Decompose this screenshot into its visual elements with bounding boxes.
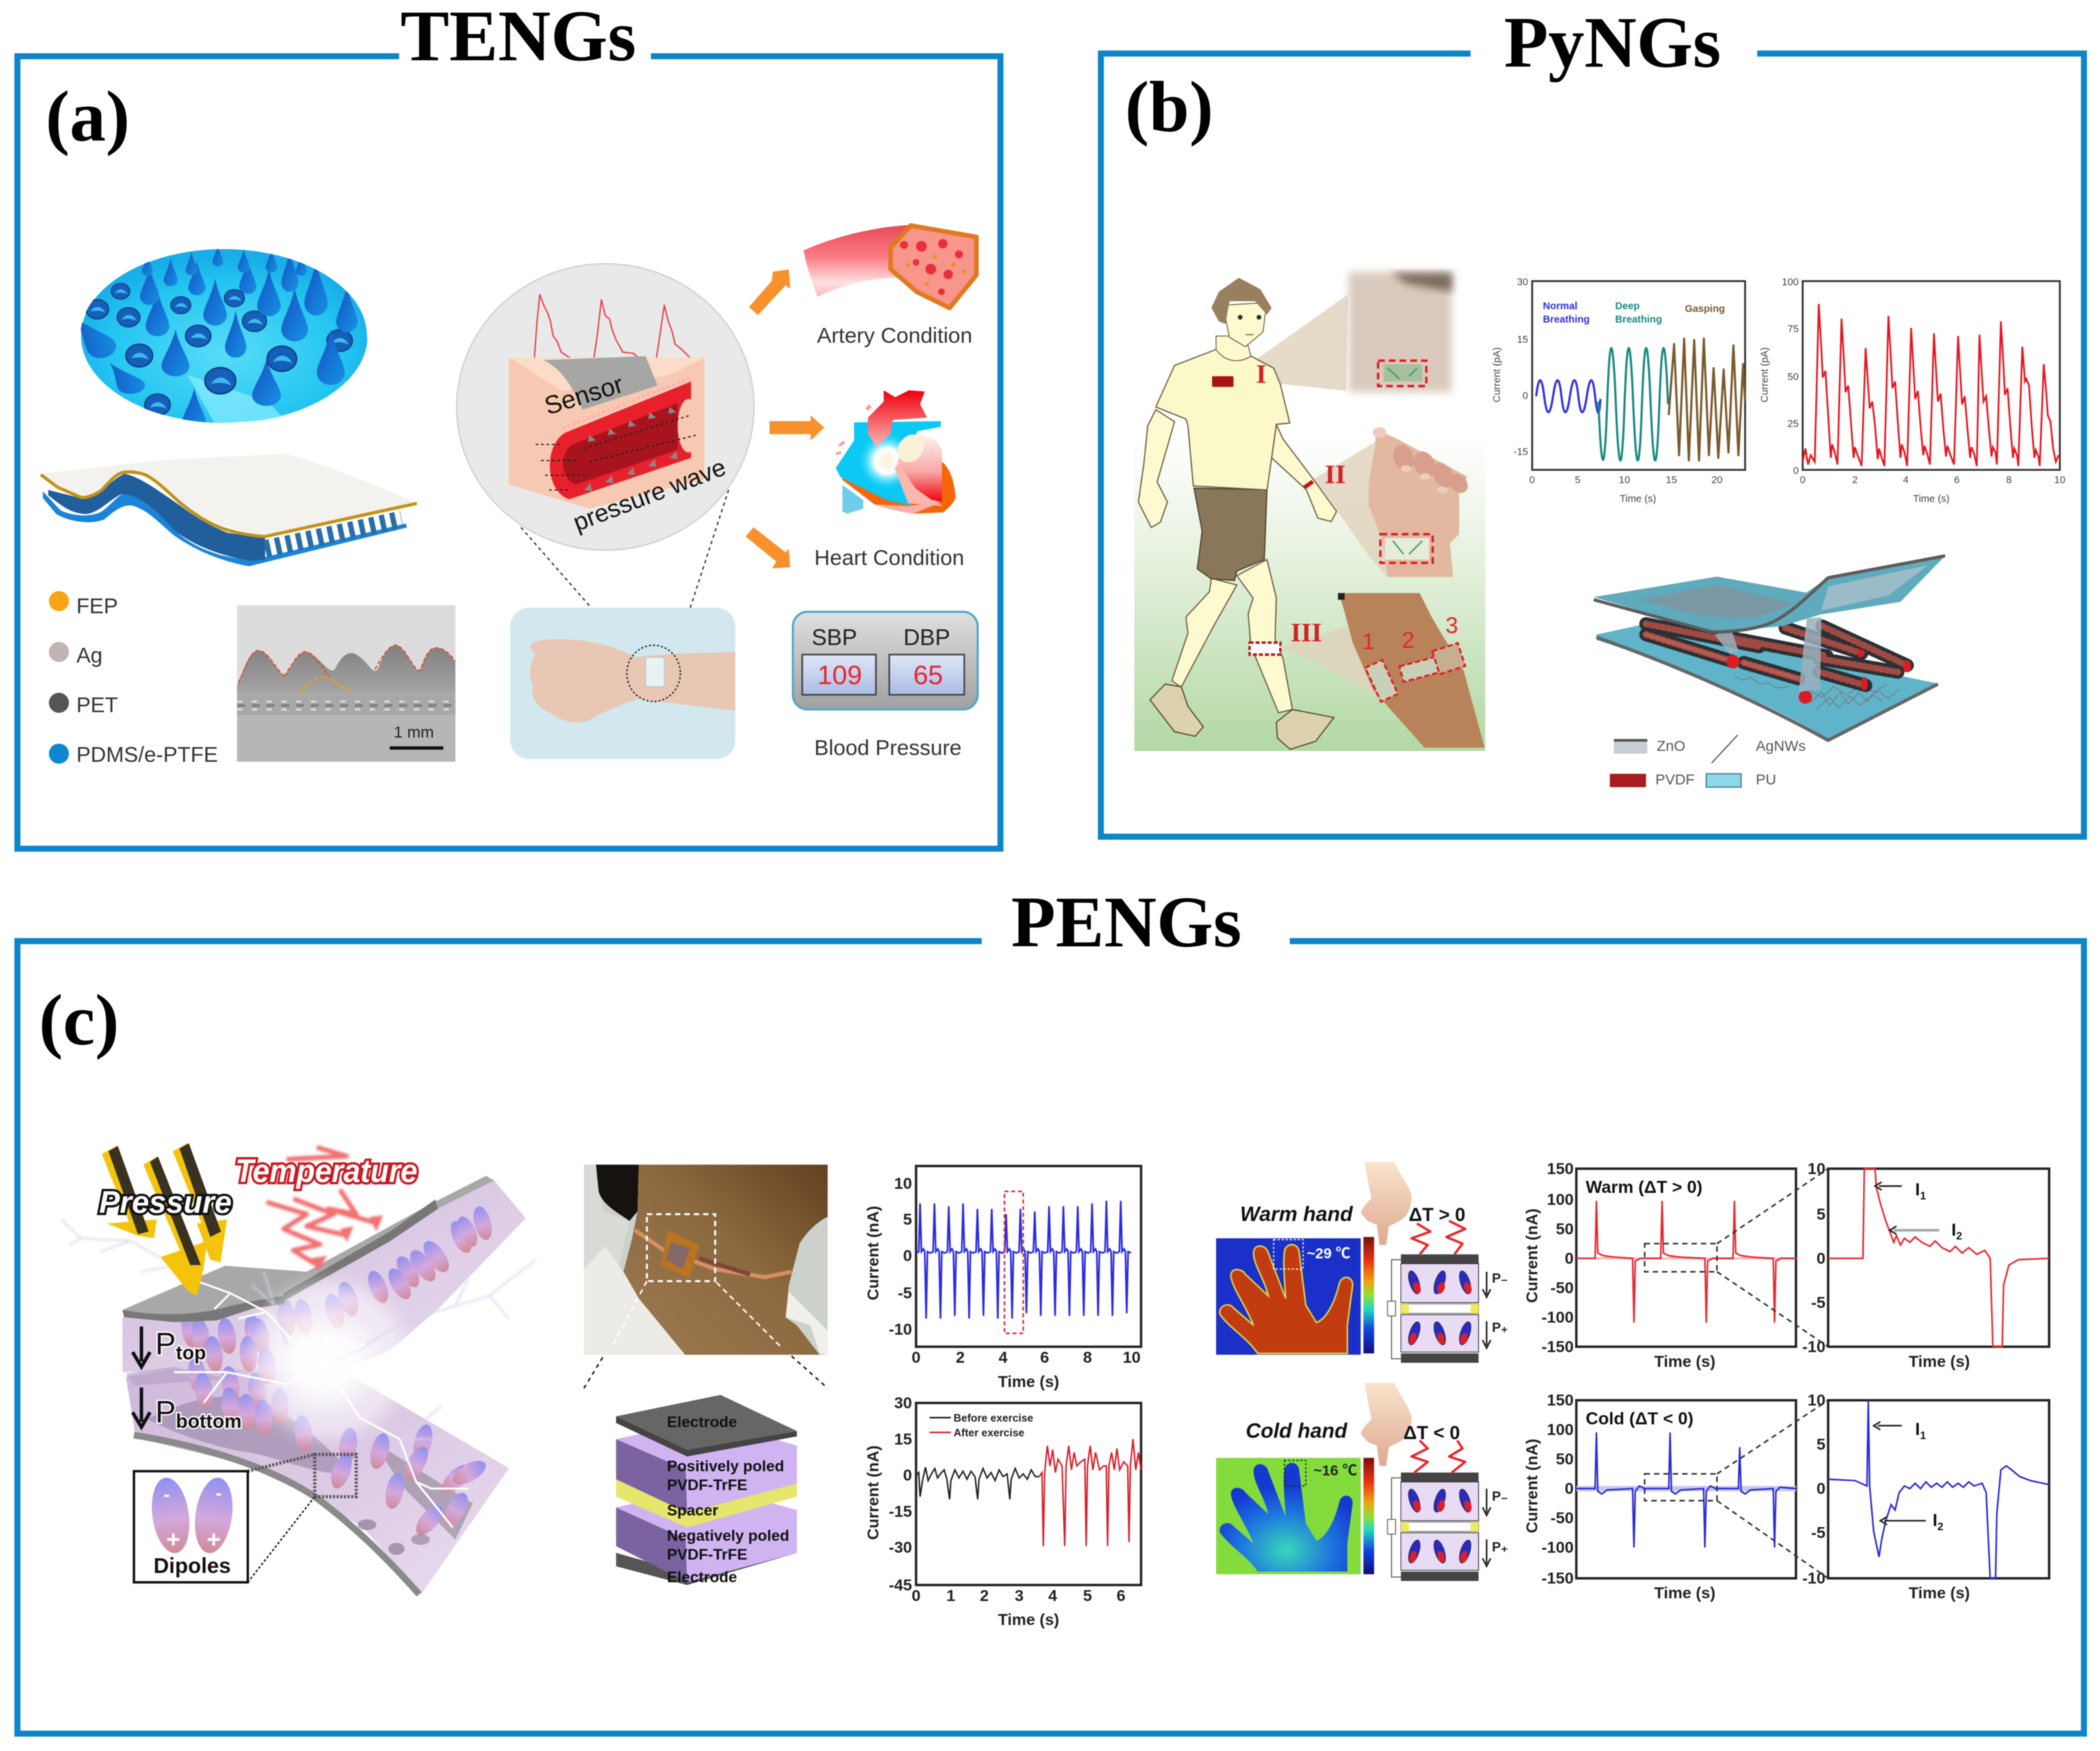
panel frame a (17, 56, 1001, 848)
diagram: PENG stack: Spacer (667, 1502, 718, 1519)
chart: before and after exercise: -45 (889, 1576, 912, 1593)
thermal image: warm hand: ~29 ℃ (1307, 1246, 1351, 1262)
chart: pulse current: 4 (1903, 475, 1909, 486)
chart: warm zoomed current (1802, 1159, 2049, 1370)
chart: before and after exercise: 0 (912, 1587, 921, 1604)
chart: before and after exercise: 6 (1116, 1587, 1125, 1604)
legend: materials: PDMS/e-PTFE (76, 742, 218, 766)
arrow and label: P top: P (155, 1326, 176, 1361)
chart: pulse current: 0 (1793, 466, 1799, 477)
dotted zoom square and leader lines (248, 1454, 356, 1583)
legend: PyNG materials: ZnO (1657, 738, 1686, 755)
polarization labels: cold: P₋ (1492, 1489, 1508, 1504)
label: delta T below zero: ΔT < 0 (1403, 1422, 1460, 1444)
chart: breathing current: Breathing (1543, 314, 1590, 325)
label: blood pressure: Blood Pressure (814, 736, 962, 760)
heading: PENGs: PENGs (1011, 882, 1242, 962)
polarization labels: cold (1483, 1489, 1508, 1566)
photo: wrist sensor (1368, 427, 1471, 577)
illustration: walking person with sensors (1134, 264, 1485, 751)
inset: dipoles (134, 1471, 248, 1583)
inset: dipoles: - (164, 1483, 170, 1504)
label: warm hand: Warm hand (1240, 1203, 1353, 1226)
arrow: to blood pressure (746, 527, 790, 568)
blood pressure monitor: DBP (903, 625, 950, 651)
chart: cold zoomed current: 5 (1816, 1435, 1825, 1453)
photo: leg sensors (1338, 593, 1485, 748)
chart: neck current: 6 (1040, 1348, 1049, 1366)
chart: neck current: 5 (903, 1211, 912, 1229)
panel: PENGs (17, 882, 2084, 1734)
chart: before and after exercise: 5 (1083, 1587, 1092, 1604)
chart: pulse current: Time (s) (1913, 494, 1949, 505)
chart: neck current: 0 (903, 1247, 912, 1265)
chart: breathing current: Current (pA) (1492, 347, 1503, 403)
chart: before and after exercise: 30 (895, 1394, 912, 1412)
chart: breathing current: 10 (1619, 475, 1630, 486)
label: heart condition: Heart Condition (814, 546, 964, 570)
polarization labels: warm: P₊ (1492, 1320, 1508, 1335)
chart: cold current: Current (nA) (1523, 1439, 1541, 1533)
arrow and label: P bottom: P (155, 1394, 176, 1429)
chart: breathing current: Deep (1615, 301, 1640, 312)
label: temperature: Temperature (236, 1153, 417, 1189)
chart: breathing current: Normal (1543, 301, 1577, 312)
chart: warm zoomed current: 1 (1920, 1191, 1926, 1202)
chart: cold zoomed current: -5 (1811, 1524, 1825, 1541)
legend: materials: Ag (76, 644, 103, 668)
chart: warm zoomed current: 5 (1816, 1205, 1825, 1223)
arrow and label: P top (133, 1326, 206, 1367)
chart: cold zoomed current: Time (s) (1909, 1584, 1970, 1602)
chart: cold zoomed current: 1 (1920, 1431, 1926, 1442)
panel label (a): (a) (45, 76, 130, 156)
illustration: wavy TENG layered device (41, 454, 417, 566)
chart: neck current: 0 (912, 1348, 921, 1366)
icon: hand touching warm device (1361, 1162, 1412, 1245)
chart: neck current: 10 (895, 1174, 912, 1192)
chart: before and after exercise: -15 (889, 1502, 912, 1520)
panel label (c): (c) (39, 980, 119, 1060)
chart: warm zoomed current: I (1915, 1181, 1920, 1200)
chart: neck current: Current (nA) (864, 1206, 882, 1300)
illustration: walking person with sensors: I (1256, 360, 1266, 389)
legend: PyNG materials: AgNWs (1755, 738, 1805, 755)
SEM micrograph (237, 605, 455, 761)
chart: before and after exercise: 4 (1048, 1587, 1057, 1604)
chart: breathing current: 5 (1575, 475, 1580, 486)
legend: materials: PET (76, 693, 118, 717)
thermal image: cold hand (1216, 1458, 1374, 1574)
arrow and label: P bottom: bottom (176, 1411, 242, 1433)
inset: dipoles: + (207, 1526, 221, 1553)
series: gasping (1668, 339, 1745, 460)
heading: PyNGs: PyNGs (1504, 3, 1721, 83)
diagram: PENG stack: Electrode (667, 1413, 737, 1431)
diagram: PENG stack: Negatively poled (667, 1527, 789, 1544)
chart: breathing current: Time (s) (1620, 494, 1656, 505)
chart: warm zoomed current: -5 (1811, 1294, 1825, 1311)
chart: pulse current: 50 (1788, 372, 1799, 383)
chart: neck current: 8 (1083, 1348, 1092, 1366)
chart: pulse current (1760, 277, 2065, 505)
device schematic: warm (1388, 1255, 1479, 1363)
chart: before and after exercise: 15 (895, 1430, 912, 1448)
legend: PyNG materials (1610, 735, 1805, 788)
thermal image: warm hand (1216, 1237, 1374, 1355)
arrow and label: P bottom (133, 1387, 242, 1433)
diagram: PENG stack: Positively poled (667, 1457, 784, 1474)
chart: pulse current: 25 (1788, 419, 1799, 430)
chart: before and after exercise: Current (nA) (864, 1446, 882, 1540)
chart: cold current: -150 (1542, 1570, 1574, 1587)
label: delta T above zero: ΔT > 0 (1409, 1204, 1465, 1225)
chart: pulse current: Current (pA) (1760, 347, 1771, 403)
dashed zoom box and lines: cold (1645, 1400, 1828, 1578)
icon: temperature waves (266, 1147, 383, 1272)
blood pressure monitor: 109 (817, 661, 862, 690)
chart: neck current: Time (s) (998, 1372, 1059, 1390)
chart: warm current: 50 (1555, 1220, 1574, 1237)
chart: pulse current: 0 (1800, 475, 1805, 486)
dotted zoom lines to wrist (521, 490, 729, 655)
chart: warm current: -150 (1542, 1337, 1574, 1355)
diagram: PENG stack (616, 1395, 797, 1586)
chart: warm zoomed current: Time (s) (1909, 1352, 1970, 1370)
diagram: PENG stack: PVDF-TrFE (667, 1546, 747, 1563)
chart: neck current: 4 (999, 1348, 1008, 1366)
chart: pulse current: 75 (1788, 324, 1799, 335)
chart: breathing current: 0 (1529, 475, 1535, 486)
panel frame c (17, 941, 2084, 1734)
chart: warm zoomed current: 10 (1808, 1159, 1825, 1177)
illustration: heart (836, 390, 955, 514)
arrow: to artery (749, 269, 790, 315)
heat waves: cold (1412, 1440, 1465, 1472)
chart: neck current: 10 (1123, 1348, 1140, 1366)
label: artery condition: Artery Condition (817, 323, 973, 347)
chart: before and after exercise: -30 (889, 1539, 912, 1557)
panel: TENGs (17, 0, 1001, 848)
chart: warm current: -100 (1542, 1308, 1574, 1326)
arrow and label: P top: top (176, 1342, 206, 1364)
chart: pulse current: 100 (1782, 277, 1799, 288)
chart: warm zoomed current: 2 (1956, 1231, 1962, 1242)
thermal image: cold hand: ~16 ℃ (1314, 1462, 1358, 1478)
chart: before and after exercise: After exercise (953, 1428, 1025, 1439)
chart: breathing current: 15 (1517, 334, 1528, 345)
circular inset: sensor and artery (457, 264, 754, 550)
chart: cold zoomed current: I (1915, 1420, 1920, 1439)
chart: cold current: 100 (1547, 1421, 1574, 1439)
photo: sensor on neck (584, 1165, 827, 1355)
illustration: walking person with sensors: III (1290, 618, 1322, 647)
chart: warm current (1523, 1159, 1796, 1370)
chart: pulse current: 8 (2006, 475, 2012, 486)
blood pressure monitor (793, 612, 977, 709)
blood pressure monitor: SBP (812, 625, 857, 651)
chart: before and after exercise (864, 1394, 1141, 1628)
icon: pressure bolts (102, 1143, 227, 1296)
chart: cold zoomed current: 0 (1816, 1480, 1825, 1498)
legend: PyNG materials: PU (1755, 772, 1776, 788)
photo: chest sensor (1349, 272, 1452, 392)
chart: warm current: 100 (1547, 1190, 1574, 1208)
legend: materials: FEP (76, 594, 118, 618)
chart: cold current: 0 (1564, 1480, 1574, 1498)
inset: dipoles: - (216, 1482, 222, 1503)
chart: breathing current: Gasping (1685, 303, 1725, 314)
chart: warm current: Current (nA) (1523, 1209, 1541, 1303)
arrow: to heart (770, 416, 825, 440)
inset: dipoles: Dipoles (153, 1554, 231, 1578)
device schematic: cold (1388, 1472, 1479, 1581)
panel frame b (1101, 53, 2084, 837)
chart: before and after exercise: 3 (1015, 1587, 1024, 1604)
chart: warm zoomed current: I (1951, 1220, 1956, 1239)
chart: warm zoomed current: 0 (1816, 1249, 1825, 1267)
illustration: walking person with sensors: II (1325, 460, 1346, 490)
chart: before and after exercise: 2 (980, 1587, 989, 1604)
photo: leg sensors: 2 (1402, 628, 1414, 653)
circular inset: sensor and artery: Sensor (541, 369, 627, 420)
heat waves: warm (1412, 1221, 1465, 1255)
chart: cold current: 150 (1547, 1391, 1574, 1409)
label: cold hand: Cold hand (1246, 1420, 1348, 1443)
illustration: spiked PDMS disc (79, 248, 368, 424)
chart: before and after exercise: 0 (903, 1466, 912, 1484)
chart: cold current (1523, 1391, 1796, 1602)
chart: cold current: 50 (1555, 1450, 1574, 1468)
series: normal breathing (1536, 380, 1601, 413)
chart: breathing current: 30 (1517, 277, 1528, 288)
dashed zoom box and lines: warm (1645, 1169, 1828, 1347)
chart: breathing current: 0 (1523, 391, 1528, 402)
chart: warm current: -50 (1551, 1278, 1574, 1296)
chart: cold current: -50 (1551, 1509, 1574, 1527)
chart: breathing current: -15 (1514, 447, 1528, 458)
dashed leader lines to stack (584, 1356, 827, 1388)
polarization labels: warm: P₋ (1492, 1271, 1508, 1286)
chart: breathing current: Breathing (1615, 314, 1662, 325)
chart: cold current: -100 (1542, 1539, 1574, 1557)
chart: before and after exercise: 1 (947, 1587, 955, 1604)
diagram: PENG stack: PVDF-TrFE (667, 1476, 747, 1494)
chart: cold current: Time (s) (1654, 1584, 1716, 1602)
chart: warm current: Warm (ΔT > 0) (1586, 1178, 1703, 1197)
SEM micrograph: 1 mm (394, 723, 434, 741)
chart: cold current: Cold (ΔT < 0) (1586, 1409, 1693, 1428)
chart: breathing current: 20 (1712, 475, 1723, 486)
chart: before and after exercise: Before exercise (953, 1413, 1034, 1424)
chart: breathing current (1492, 277, 1745, 505)
chart: pulse current: 2 (1852, 475, 1858, 486)
chart: pulse current: 10 (2054, 475, 2065, 486)
chart: cold zoomed current: -10 (1802, 1570, 1825, 1587)
chart: warm current: 0 (1564, 1249, 1574, 1267)
photo: leg sensors: 3 (1445, 614, 1458, 639)
legend: PyNG materials: PVDF (1655, 772, 1695, 788)
series: deep breathing (1599, 348, 1668, 460)
chart: neck current: -5 (898, 1284, 912, 1302)
chart: cold zoomed current (1802, 1391, 2049, 1602)
panel label (b): (b) (1125, 67, 1214, 147)
legend: materials (49, 591, 218, 766)
chart: cold zoomed current: 10 (1808, 1391, 1825, 1409)
chart: warm current: 150 (1547, 1159, 1574, 1177)
chart: cold zoomed current: I (1933, 1511, 1938, 1530)
photo: sensor on wrist (510, 608, 735, 759)
chart: neck current (864, 1166, 1141, 1390)
illustration: PyNG 3D device (1594, 556, 1945, 740)
blood pressure monitor: 65 (913, 661, 943, 690)
polarization labels: warm (1483, 1271, 1508, 1348)
diagram: PENG stack: Electrode (667, 1569, 737, 1586)
chart: warm zoomed current: -10 (1802, 1337, 1825, 1355)
circular inset: sensor and artery: pressure wave (569, 453, 729, 537)
chart: pulse current: 6 (1954, 475, 1960, 486)
panel: PyNGs (1101, 3, 2084, 837)
inset: dipoles: + (166, 1526, 180, 1553)
chart: cold zoomed current: 2 (1938, 1521, 1944, 1533)
chart: neck current: 2 (955, 1348, 965, 1366)
label: pressure: Pressure (99, 1185, 232, 1220)
chart: neck current: -10 (889, 1320, 912, 1338)
photo: leg sensors: 1 (1362, 629, 1375, 655)
chart: before and after exercise: Time (s) (998, 1611, 1059, 1628)
chart: breathing current: 15 (1666, 475, 1677, 486)
polarization labels: cold: P₊ (1492, 1540, 1508, 1555)
illustration: bent PENG with dipoles (61, 1176, 536, 1594)
icon: hand touching cold device (1361, 1383, 1412, 1466)
chart: warm current: Time (s) (1654, 1352, 1716, 1370)
illustration: artery (803, 225, 976, 308)
